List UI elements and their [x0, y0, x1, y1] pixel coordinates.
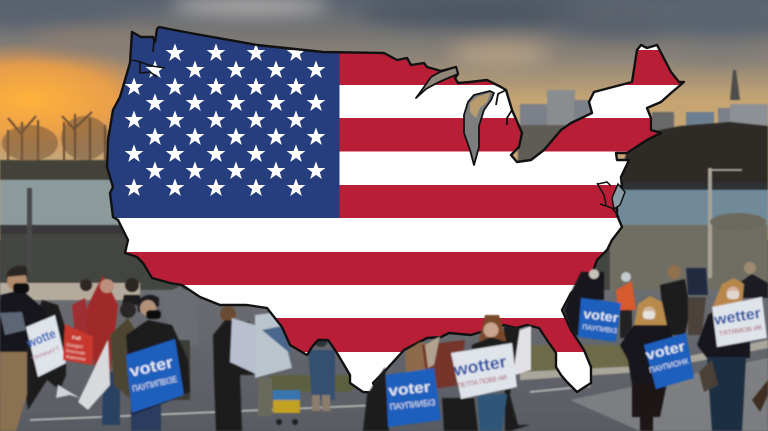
sign: red placard: Fall — [72, 335, 82, 342]
cart — [273, 390, 300, 425]
person: patterned shirt — [213, 306, 258, 431]
protester: dark figure at back — [122, 278, 142, 305]
protester: long dark coat — [660, 265, 690, 335]
sign: blue voter, right: ПАУПИОНК — [648, 356, 690, 375]
background: city skyline — [518, 70, 768, 168]
sign: white wotter, right — [712, 297, 767, 347]
protester: blonde with brown top — [405, 336, 478, 431]
Puget Sound inlet — [132, 41, 165, 77]
white flag — [78, 340, 110, 410]
protester: red jacket — [72, 279, 92, 335]
foreground crowd: right — [564, 262, 768, 431]
background: sunset sky — [0, 0, 768, 240]
sign: blue voter, centre left — [126, 339, 184, 413]
sign: red placard — [63, 324, 93, 365]
protester: olive coat — [110, 302, 136, 400]
people behind the map — [163, 286, 335, 431]
Lake Michigan — [464, 91, 494, 165]
notch background between Michigan and New York — [518, 125, 566, 168]
sign: white wotter, bottom: ПЕТПА ПОВВ НИ — [457, 374, 508, 390]
protester: holding blue sign — [126, 295, 190, 431]
sign: blue voter, bottom: voter — [388, 379, 431, 400]
protester: right woman with bag — [697, 278, 750, 431]
protester: dark coat behind sign — [20, 300, 80, 410]
sign: blue voter, right — [644, 333, 694, 389]
black-clad figure — [363, 367, 389, 431]
foreground crowd: map bottom — [363, 315, 531, 431]
Lake Superior — [416, 67, 458, 98]
person: denim — [308, 333, 335, 411]
map outline — [107, 27, 684, 393]
white sign behind — [512, 326, 531, 376]
sign: blue voter, right: voter — [644, 338, 687, 363]
sign: white wotte: TRINNATT — [31, 346, 61, 363]
sign: blue voter, centre left: voter — [128, 354, 175, 381]
sign: blue voter, centre left: ПАУПИПВІЗЕ — [131, 374, 178, 394]
map of the United States filled with the flag — [106, 26, 686, 394]
sign: white wotter, bottom: wotter — [451, 352, 508, 380]
sign: white wotte: wotte — [24, 326, 58, 351]
flag canton — [100, 20, 340, 218]
sign: red placard: Ratemnor — [66, 354, 87, 362]
foreground crowd: left — [0, 266, 190, 431]
sign: red placard: Dococopr — [66, 348, 86, 356]
sign: blue voter, bottom: ПАУПИИБІЗ — [389, 397, 436, 412]
sign: blue voter, centre right — [578, 298, 621, 342]
dark figure behind — [504, 326, 530, 431]
background: tree line and river — [0, 112, 768, 228]
Lake Huron — [496, 90, 512, 125]
boot at right edge — [752, 380, 768, 412]
protester: dark coat at map edge — [564, 269, 604, 337]
flag stripes — [117, 46, 678, 392]
sign: white wotter, right: wetter — [712, 305, 762, 329]
protester: centre woman in black — [620, 296, 674, 431]
sign: red placard: Giazgtot — [66, 342, 84, 349]
sign: blue voter, centre right: ПАУПИВІЗ — [582, 324, 617, 335]
protester: long hair and jeans — [470, 315, 512, 431]
sign: white wotter, bottom — [451, 343, 517, 399]
sign: blue voter, centre right: voter — [583, 306, 619, 325]
protester: navy backpack — [686, 268, 708, 335]
Chesapeake Bay — [612, 184, 625, 209]
flag stars — [125, 43, 325, 196]
sign: white wotte — [24, 315, 66, 377]
protester: hat at back — [739, 262, 768, 298]
protester: hoodie and tan trousers — [0, 266, 48, 431]
person: grey jacket — [163, 286, 198, 400]
background: bridge, fence and ground — [0, 168, 768, 431]
protester: red hair and coat — [86, 275, 120, 425]
sign: blue voter, bottom — [386, 368, 441, 427]
sign: white wotter, right: ТЯТЯМОВ ИК — [718, 324, 763, 338]
person: pale blue parka — [255, 312, 292, 416]
protester: orange jacket — [616, 272, 636, 338]
